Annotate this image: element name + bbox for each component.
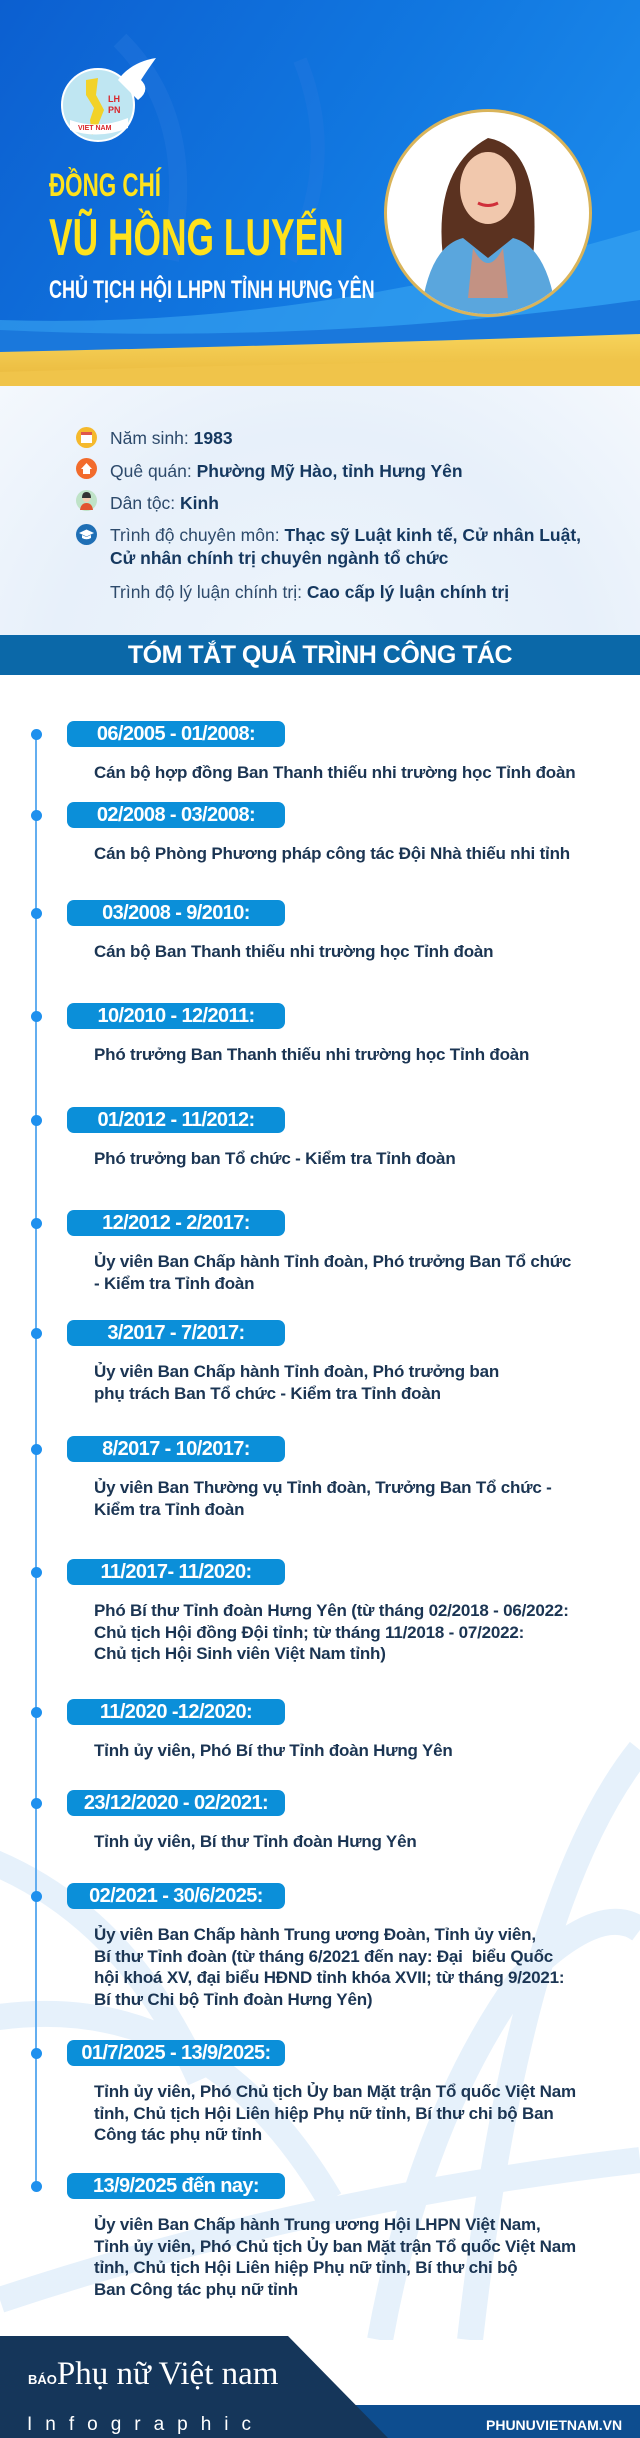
footer subtitle: Infographic bbox=[27, 2414, 264, 2435]
entry 10 bbox=[31, 1699, 453, 1760]
entry 2 bbox=[31, 802, 570, 863]
info: qualifications bbox=[76, 524, 581, 568]
entry 9: 11/2017- 11/2020: bbox=[100, 1561, 252, 1583]
icon: person bbox=[76, 490, 97, 511]
entry 4: 10/2010 - 12/2011: bbox=[97, 1005, 255, 1027]
entry 1: Cán bộ hợp đồng Ban Thanh thiếu nhi trường học Tỉnh đoàn bbox=[94, 763, 575, 782]
entry 10: Tỉnh ủy viên, Phó Bí thư Tỉnh đoàn Hưng Yên bbox=[94, 1741, 453, 1760]
entry 8: Kiểm tra Tỉnh đoàn bbox=[94, 1500, 244, 1519]
entry 13: Tỉnh ủy viên, Phó Chủ tịch Ủy ban Mặt trận Tổ quốc Việt Nam bbox=[94, 2082, 576, 2101]
entry 1: 06/2005 - 01/2008: bbox=[97, 723, 255, 745]
footer logo: BÁOPhụ nữ Việt nam bbox=[28, 2356, 278, 2392]
entry 14 bbox=[31, 2173, 576, 2299]
entry 14: Ban Công tác phụ nữ tỉnh bbox=[94, 2280, 298, 2299]
logo: LHPN Viet Nam bbox=[61, 58, 156, 142]
entry 6 bbox=[31, 1210, 571, 1293]
entry 5 bbox=[31, 1107, 456, 1168]
info: political theory: Trình độ lý luận chính trị: Cao cấp lý luận chính trị bbox=[110, 582, 509, 602]
entry 13: 01/7/2025 - 13/9/2025: bbox=[81, 2042, 271, 2064]
entry 4 bbox=[31, 1003, 529, 1064]
entry 14: tỉnh, Chủ tịch Hội Liên hiệp Phụ nữ tỉnh, Bí thư chi bộ bbox=[94, 2258, 517, 2277]
logo: LHPN Viet Nam: PN bbox=[108, 105, 121, 115]
entry 4: Phó trưởng Ban Thanh thiếu nhi trường học Tỉnh đoàn bbox=[94, 1045, 529, 1064]
entry 9: Phó Bí thư Tỉnh đoàn Hưng Yên (từ tháng 02/2018 - 06/2022: bbox=[94, 1601, 569, 1620]
logo: LHPN Viet Nam: LH bbox=[108, 94, 120, 104]
info section background bbox=[0, 386, 640, 635]
section banner bbox=[0, 635, 640, 675]
entry 9: Chủ tịch Hội đồng Đội tỉnh; từ tháng 11/2018 - 07/2022: bbox=[94, 1623, 524, 1642]
portrait bbox=[384, 109, 592, 317]
entry 13: Công tác phụ nữ tỉnh bbox=[94, 2125, 262, 2144]
entry 1 bbox=[31, 721, 575, 782]
title: ĐỒNG CHÍ bbox=[49, 167, 161, 203]
icon: house bbox=[76, 458, 97, 479]
entry 10: 11/2020 -12/2020: bbox=[100, 1701, 252, 1723]
entry 11: 23/12/2020 - 02/2021: bbox=[84, 1792, 268, 1814]
timeline background watermark bbox=[0, 1742, 640, 2340]
footer bbox=[0, 2336, 640, 2438]
entry 13: tỉnh, Chủ tịch Hội Liên hiệp Phụ nữ tỉnh, Bí thư chi bộ Ban bbox=[94, 2104, 554, 2123]
entry 3 bbox=[31, 900, 493, 961]
entry 11 bbox=[31, 1790, 417, 1851]
website: PHUNUVIETNAM.VN bbox=[486, 2417, 622, 2433]
entry 5: 01/2012 - 11/2012: bbox=[97, 1109, 255, 1131]
entry 9: Chủ tịch Hội Sinh viên Việt Nam tỉnh) bbox=[94, 1644, 386, 1663]
entry 7: Ủy viên Ban Chấp hành Tỉnh đoàn, Phó trưởng ban bbox=[94, 1362, 499, 1381]
entry 2: Cán bộ Phòng Phương pháp công tác Đội Nhà thiếu nhi tỉnh bbox=[94, 844, 570, 863]
entry 2: 02/2008 - 03/2008: bbox=[97, 804, 255, 826]
entry 8: 8/2017 - 10/2017: bbox=[102, 1438, 250, 1460]
info: qualifications: Trình độ chuyên môn: Thạc sỹ Luật kinh tế, Cử nhân Luật, bbox=[110, 525, 581, 545]
entry 13 bbox=[31, 2040, 576, 2144]
info: ethnicity bbox=[76, 490, 219, 513]
entry 8: Ủy viên Ban Thường vụ Tỉnh đoàn, Trưởng Ban Tổ chức - bbox=[94, 1478, 552, 1497]
logo: LHPN Viet Nam: VIET NAM bbox=[78, 125, 112, 132]
title: VŨ HỒNG LUYẾN bbox=[49, 209, 344, 267]
entry 5: Phó trưởng ban Tổ chức - Kiểm tra Tỉnh đoàn bbox=[94, 1149, 456, 1168]
entry 9 bbox=[31, 1559, 569, 1663]
entry 12: Bí thư Tỉnh đoàn (từ tháng 6/2021 đến nay: Đại biểu Quốc bbox=[94, 1947, 553, 1966]
timeline axis bbox=[35, 730, 37, 2186]
entry 12: hội khoá XV, đại biểu HĐND tỉnh khóa XVII; từ tháng 9/2021: bbox=[94, 1968, 564, 1987]
entry 7: 3/2017 - 7/2017: bbox=[107, 1322, 245, 1344]
entry 6: Ủy viên Ban Chấp hành Tỉnh đoàn, Phó trưởng Ban Tổ chức bbox=[94, 1252, 571, 1271]
title: CHỦ TỊCH HỘI LHPN TỈNH HƯNG YÊN bbox=[49, 276, 375, 304]
entry 6: 12/2012 - 2/2017: bbox=[102, 1212, 250, 1234]
entry 14: 13/9/2025 đến nay: bbox=[93, 2175, 259, 2197]
info: ethnicity: Dân tộc: Kinh bbox=[110, 493, 219, 513]
entry 3: 03/2008 - 9/2010: bbox=[102, 902, 250, 924]
entry 14: Tỉnh ủy viên, Phó Chủ tịch Ủy ban Mặt trận Tổ quốc Việt Nam bbox=[94, 2237, 576, 2256]
info: hometown: Quê quán: Phường Mỹ Hào, tỉnh Hưng Yên bbox=[110, 461, 463, 481]
icon: graduation cap bbox=[76, 524, 97, 545]
entry 12 bbox=[31, 1883, 564, 2009]
entry 12: 02/2021 - 30/6/2025: bbox=[89, 1885, 263, 1907]
info: birth year: Năm sinh: 1983 bbox=[110, 428, 233, 448]
entry 8 bbox=[31, 1436, 552, 1519]
entry 7: phụ trách Ban Tổ chức - Kiểm tra Tỉnh đoàn bbox=[94, 1384, 441, 1403]
entry 3: Cán bộ Ban Thanh thiếu nhi trường học Tỉnh đoàn bbox=[94, 942, 493, 961]
entry 14: Ủy viên Ban Chấp hành Trung ương Hội LHPN Việt Nam, bbox=[94, 2215, 540, 2234]
icon: calendar bbox=[76, 427, 97, 448]
entry 12: Bí thư Chi bộ Tỉnh đoàn Hưng Yên) bbox=[94, 1990, 372, 2009]
header background bbox=[0, 0, 640, 386]
info: qualifications: Cử nhân chính trị chuyên ngành tổ chức bbox=[110, 548, 448, 568]
entry 12: Ủy viên Ban Chấp hành Trung ương Đoàn, Tỉnh ủy viên, bbox=[94, 1925, 536, 1944]
title bbox=[49, 167, 375, 304]
entry 11: Tỉnh ủy viên, Bí thư Tỉnh đoàn Hưng Yên bbox=[94, 1832, 417, 1851]
section banner: TÓM TẮT QUÁ TRÌNH CÔNG TÁC bbox=[128, 641, 512, 669]
entry 7 bbox=[31, 1320, 499, 1403]
entry 6: - Kiểm tra Tỉnh đoàn bbox=[94, 1274, 254, 1293]
